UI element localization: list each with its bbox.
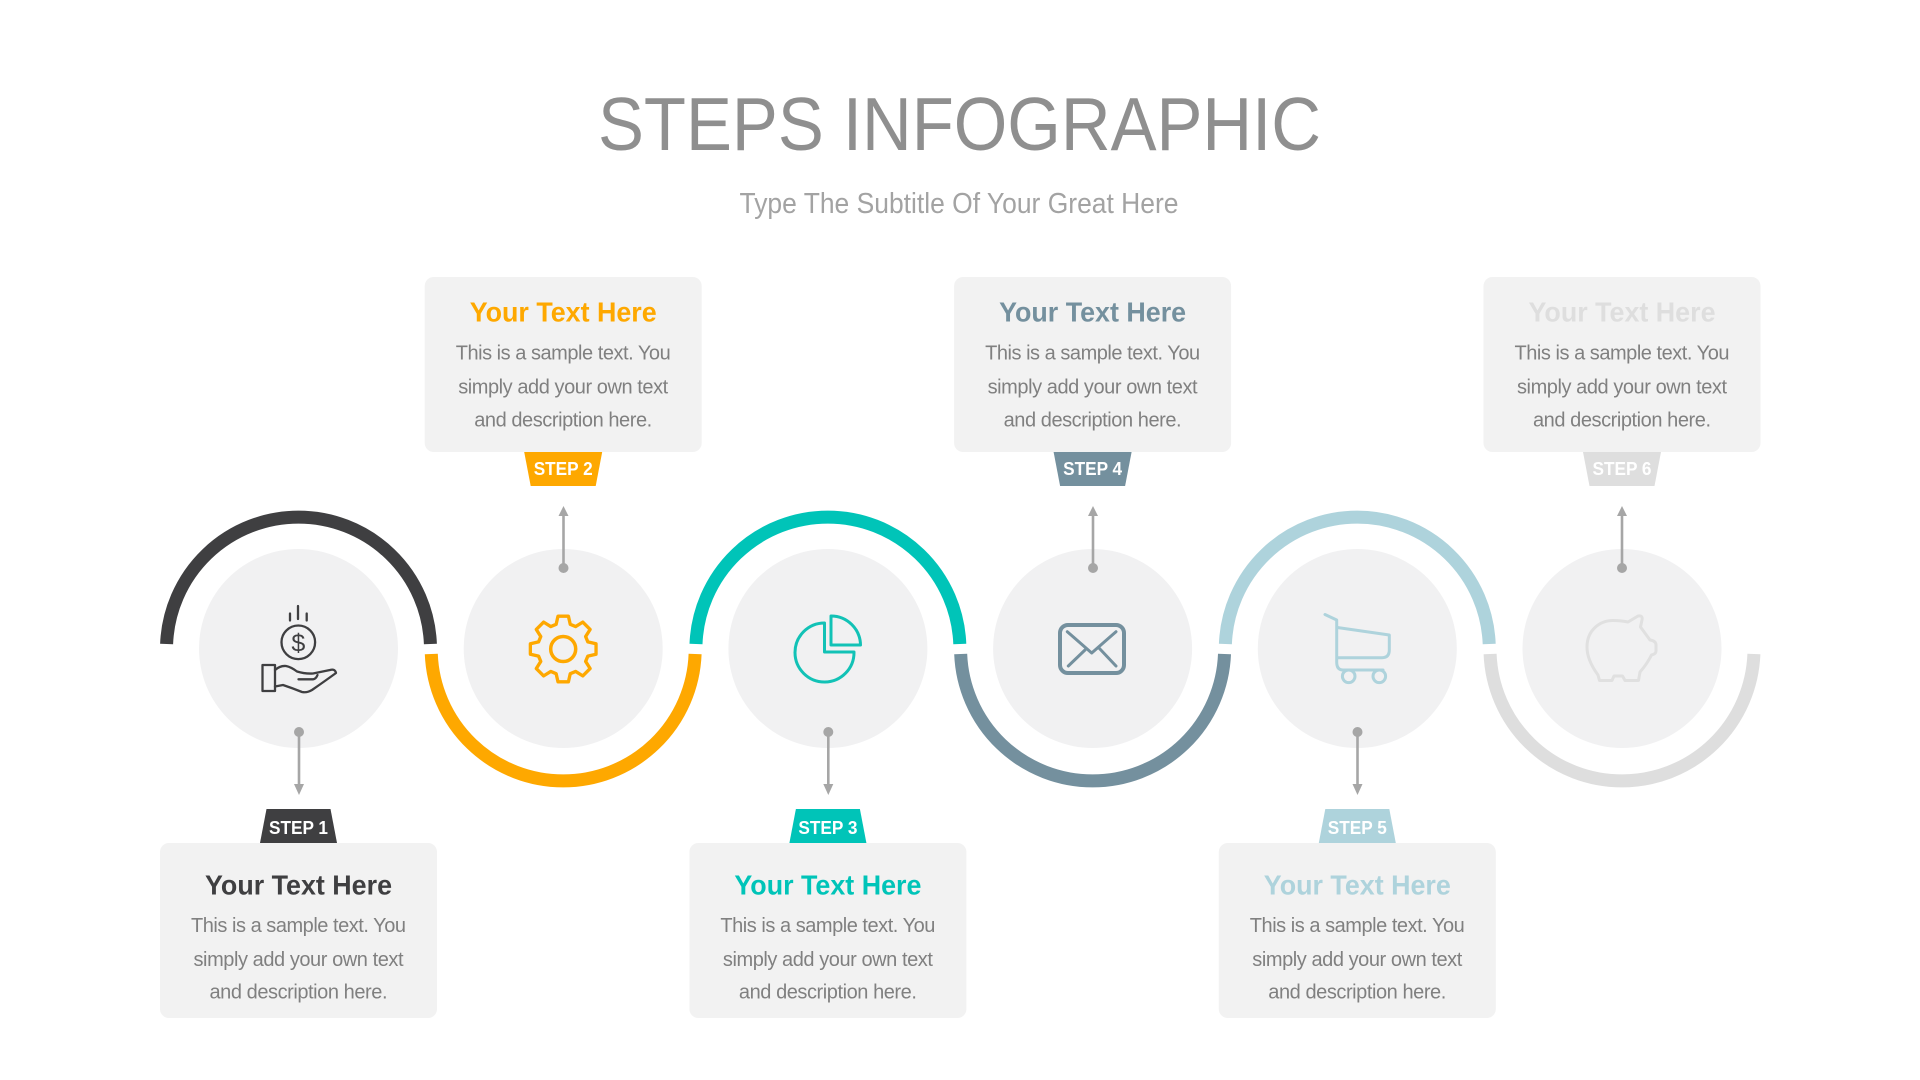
step 3 badge: STEP 3 [798,818,857,838]
step 2 card: simply add your own text [458,376,669,398]
step 5 card [1219,843,1496,1018]
step 1 card: and description here. [210,982,388,1004]
icon: hand with coin [262,606,336,692]
step 6 circle [1522,549,1722,748]
step 6 card: simply add your own text [1517,376,1727,398]
step 5 card: This is a sample text. You [1250,915,1465,937]
step 2 arrow [558,506,568,573]
step 4 card [954,277,1231,452]
step 5 arc [1225,517,1489,644]
step 3 badge [789,809,866,843]
step 2 badge: STEP 2 [534,459,593,479]
step 2 card: and description here. [474,410,652,432]
step 6 card: This is a sample text. You [1514,342,1730,364]
step 4 card: Your Text Here [999,296,1186,328]
step 4 badge: STEP 4 [1063,459,1122,479]
step 1 card: This is a sample text. You [191,915,406,937]
step 5 card: and description here. [1268,982,1446,1004]
step 4 arrow [1088,506,1098,573]
step 4 card: This is a sample text. You [985,342,1200,364]
icon: pie chart [795,616,860,682]
step 5 circle [1258,549,1457,748]
step 4 arc [961,654,1224,781]
step 4 [954,277,1231,781]
step 3 [689,517,966,1018]
step 4 circle [993,549,1192,748]
step 1 card [160,843,437,1018]
step 2 card [425,277,702,452]
step 6 card: Your Text Here [1528,296,1716,328]
step 1 badge: STEP 1 [269,818,328,838]
step 3 arc [696,517,960,644]
step 6 card [1484,277,1760,452]
step 5 card: Your Text Here [1264,870,1451,900]
icon: envelope [1060,625,1124,673]
step 5 arrow [1352,727,1362,795]
step 1 arc [167,517,430,644]
step 1 circle [199,549,398,748]
step 2 arc [431,654,695,781]
step 2 card: This is a sample text. You [456,342,671,364]
step 3 card: simply add your own text [723,949,933,971]
step 1 [160,517,437,1018]
step 3 circle [728,549,927,748]
step 2 badge [524,452,602,486]
icon: piggy bank [1587,616,1656,680]
step 4 badge [1054,452,1132,486]
step 6 badge [1583,452,1661,486]
step 3 arrow [823,727,833,795]
step 2 card: Your Text Here [470,296,657,328]
step 1 card: simply add your own text [194,949,404,971]
step 6 [1484,277,1760,781]
step 6 arc [1490,654,1754,781]
step 4 card: simply add your own text [988,376,1198,398]
step 3 card [689,843,966,1018]
icon: gear [530,616,596,682]
step 3 card: Your Text Here [734,870,921,900]
step 6 card: and description here. [1533,410,1711,432]
step 3 card: This is a sample text. You [720,915,935,937]
icon: shopping cart [1325,614,1389,683]
step 5 badge: STEP 5 [1328,818,1387,838]
step 2 [425,277,702,781]
step 6 badge: STEP 6 [1592,459,1652,479]
title: STEPS INFOGRAPHIC [598,82,1321,166]
step 5 [1219,517,1496,1018]
subtitle: Type The Subtitle Of Your Great Here [740,188,1178,220]
step 3 card: and description here. [739,982,917,1004]
step 5 card: simply add your own text [1252,949,1463,971]
step 4 card: and description here. [1004,410,1182,432]
icon: hand with coin: $ [291,630,305,658]
step 2 circle [464,549,663,748]
step 6 arrow [1617,506,1627,573]
step 5 badge [1319,809,1396,843]
step 1 arrow [294,727,304,795]
step 1 badge [260,809,337,843]
step 1 card: Your Text Here [205,870,392,900]
